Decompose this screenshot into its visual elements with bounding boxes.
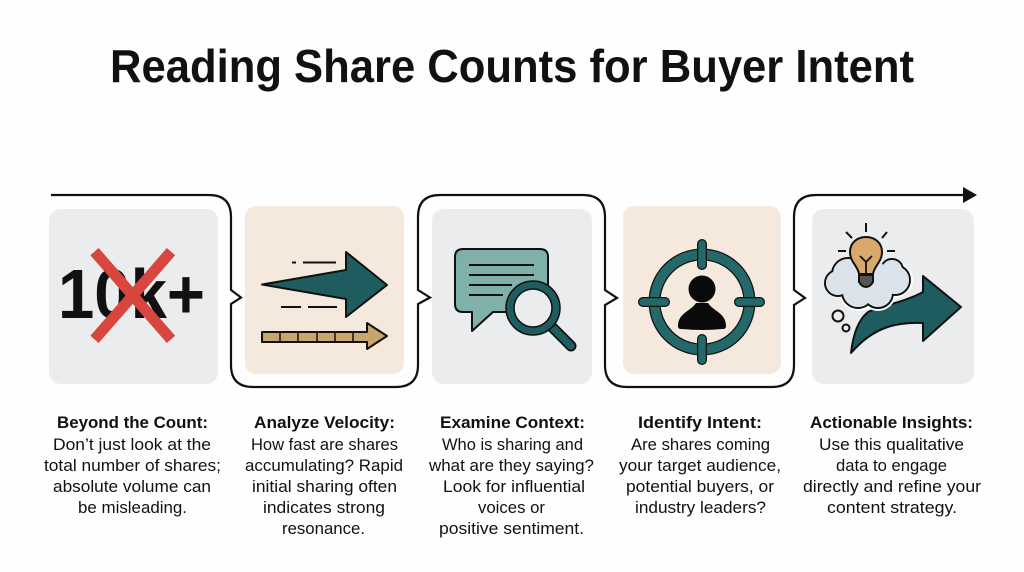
panel: card 3 background <box>432 209 592 384</box>
panel: card 1 background <box>49 209 218 384</box>
text block: analyze velocity: resonance. <box>282 519 365 538</box>
text block: analyze velocity: accumulating? Rapid <box>245 456 403 475</box>
text block: actionable insights: Use this qualitative <box>819 435 964 454</box>
text block: actionable insights: content strategy. <box>827 498 957 517</box>
text block: identify intent: Identify Intent: <box>638 413 762 432</box>
text block: analyze velocity <box>245 413 403 538</box>
icon: velocity arrows <box>262 252 387 349</box>
text block: actionable insights: data to engage <box>836 456 947 475</box>
text block: beyond the count: total number of shares; <box>44 456 221 475</box>
icon: lightbulb thought and arrow <box>825 223 961 353</box>
arrow: winding process line <box>51 187 977 387</box>
text block: examine context: what are they saying? <box>428 456 594 475</box>
text block: identify intent: your target audience, <box>619 456 781 475</box>
text block: examine context: Examine Context: <box>440 413 585 432</box>
text block: identify intent: industry leaders? <box>635 498 766 517</box>
text block: analyze velocity: Analyze Velocity: <box>254 413 395 432</box>
panel: card 4 background <box>623 206 781 374</box>
icon: crossed out 10k+: 10k+ <box>58 255 205 333</box>
text block: beyond the count: be misleading. <box>78 498 187 517</box>
text block: beyond the count <box>44 413 221 517</box>
text block: examine context: Who is sharing and <box>442 435 583 454</box>
text block: examine context <box>428 413 594 538</box>
text block: examine context: Look for influential <box>443 477 585 496</box>
text block: beyond the count: absolute volume can <box>53 477 211 496</box>
text block: actionable insights: directly and refine your <box>803 477 981 496</box>
text block: actionable insights: Actionable Insights: <box>810 413 973 432</box>
panel: card 5 background <box>812 209 974 384</box>
text block: examine context: positive sentiment. <box>439 519 584 538</box>
title: Reading Share Counts for Buyer Intent <box>110 40 914 92</box>
text block: identify intent: potential buyers, or <box>626 477 774 496</box>
text block: beyond the count: Don’t just look at the <box>53 435 211 454</box>
text block: actionable insights <box>803 413 981 517</box>
panel: card 2 background <box>245 206 404 374</box>
text block: analyze velocity: indicates strong <box>263 498 385 517</box>
text block: examine context: voices or <box>478 498 545 517</box>
text block: beyond the count: Beyond the Count: <box>57 413 208 432</box>
text block: identify intent <box>619 413 781 517</box>
text block: identify intent: Are shares coming <box>631 435 770 454</box>
icon: speech bubble with magnifier <box>455 249 571 346</box>
text block: analyze velocity: How fast are shares <box>251 435 398 454</box>
text block: analyze velocity: initial sharing often <box>252 477 397 496</box>
icon: target with person <box>643 244 760 360</box>
